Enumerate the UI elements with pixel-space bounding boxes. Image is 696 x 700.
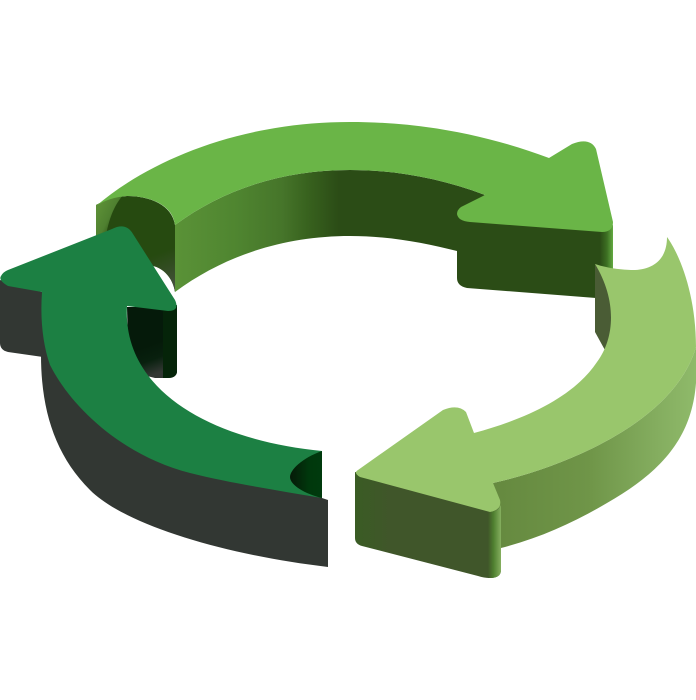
top arrow top face	[96, 122, 613, 232]
top arrow scoop shading	[130, 225, 175, 292]
left arrow end scoop	[290, 451, 322, 498]
right arrow top face	[356, 237, 696, 512]
left arrow top face	[0, 226, 322, 498]
left arrow head side	[0, 280, 50, 358]
top arrow inner wall	[175, 170, 485, 292]
arrow: right pale green	[355, 237, 696, 578]
arrow: top light green	[96, 122, 613, 298]
left arrow inner head side	[127, 307, 177, 378]
top arrow head side	[457, 213, 613, 298]
right arrow head side	[355, 472, 501, 578]
top arrow end scoop	[96, 196, 175, 292]
arrow: left dark green	[0, 226, 328, 567]
top arrow tip edge	[596, 225, 613, 270]
left arrow outer wall	[41, 340, 328, 567]
right arrow outer wall	[493, 347, 696, 548]
top arrow scoop lit side	[96, 195, 123, 245]
right arrow end scoop	[595, 264, 620, 352]
right arrow tip edge	[488, 505, 501, 578]
left arrow tip edge	[163, 305, 177, 378]
